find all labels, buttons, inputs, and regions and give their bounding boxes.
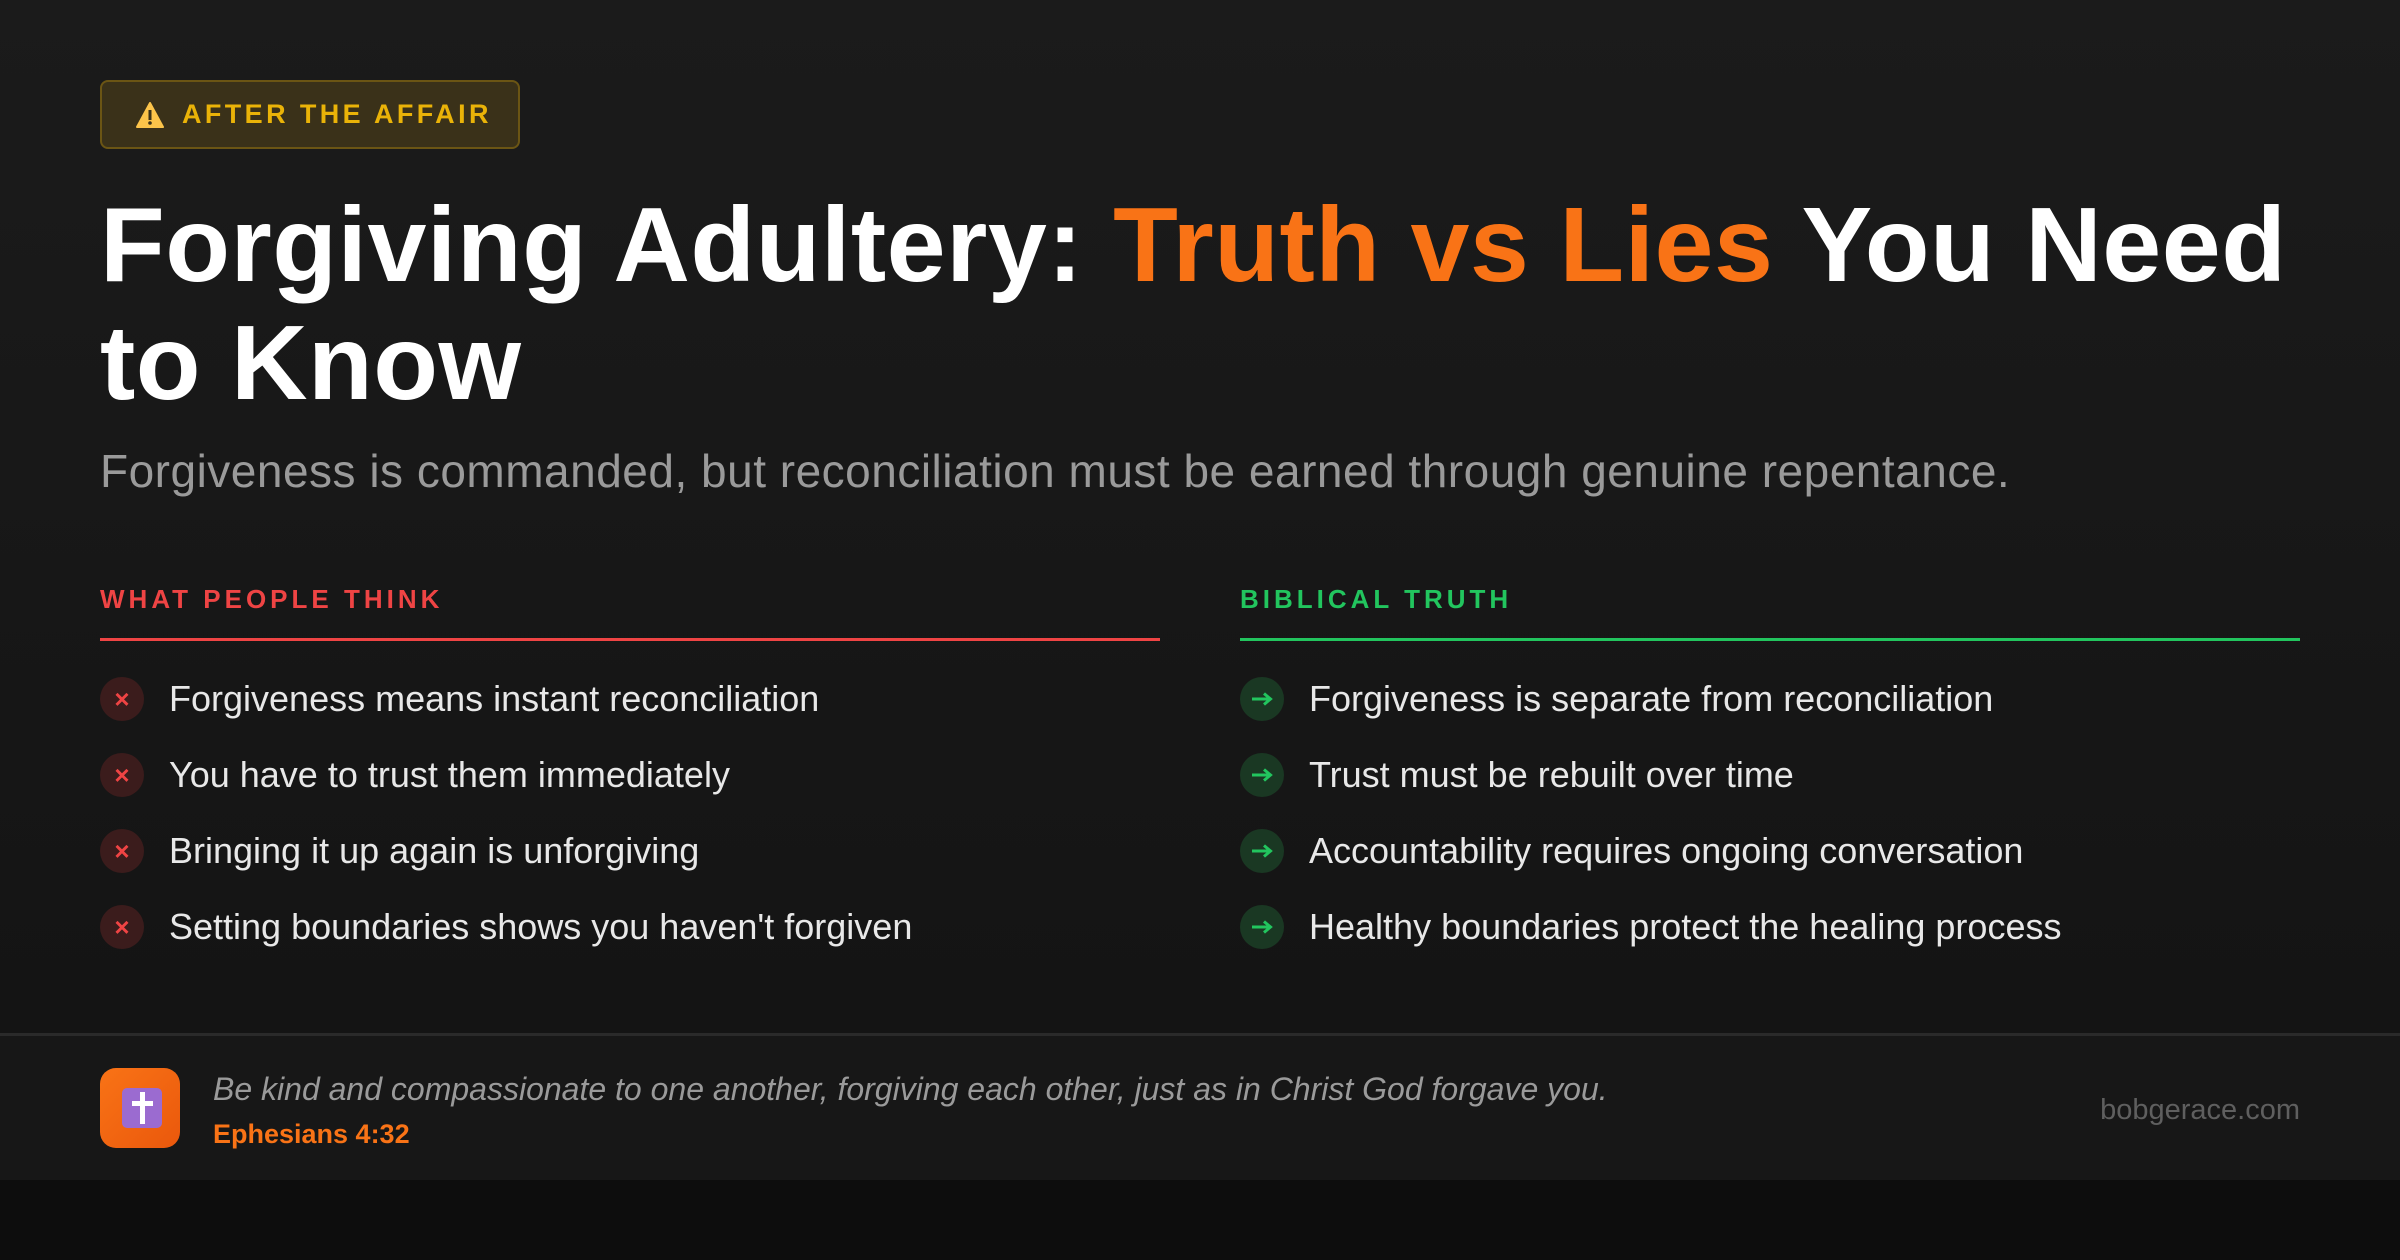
reference: Ephesians 4:32 [213, 1119, 410, 1149]
item 1: Forgiveness is separate from reconciliation [1309, 678, 1993, 719]
heading: biblical truth: BIBLICAL TRUTH [1240, 584, 1512, 614]
item 1: Forgiveness means instant reconciliation [169, 678, 819, 719]
item 2: Trust must be rebuilt over time [1309, 754, 1794, 795]
item 3: × [114, 836, 130, 866]
heading: biblical truth [1240, 580, 2300, 641]
item 2: You have to trust them immediately [169, 754, 730, 795]
item 4: Healthy boundaries protect the healing process [1309, 906, 2061, 947]
quote: Be kind and compassionate to one another, forgiving each other, just as in Christ God forgave you. [213, 1071, 1608, 1107]
subtitle: Forgiveness is commanded, but reconciliation must be earned through genuine repentance. [100, 445, 2010, 497]
panel: what people think [100, 584, 1160, 949]
panel: biblical truth [1240, 584, 2300, 949]
heading: what people think [100, 580, 1160, 641]
badge: after the affair: AFTER THE AFFAIR [182, 99, 492, 129]
badge: after the affair [100, 80, 520, 149]
icon: cross [100, 1068, 180, 1148]
item 4: Setting boundaries shows you haven't forgiven [169, 906, 912, 947]
footer [0, 1033, 2400, 1180]
item 1: × [114, 684, 130, 714]
site: bobgerace.com [2100, 1094, 2300, 1126]
item 3: Accountability requires ongoing conversation [1309, 830, 2023, 871]
item 3: Bringing it up again is unforgiving [169, 830, 699, 871]
item 4: × [114, 912, 130, 942]
item 2: × [114, 760, 130, 790]
title: Forgiving Adultery: Truth vs Lies You Need to Know [100, 186, 2286, 422]
heading: what people think: WHAT PEOPLE THINK [100, 584, 443, 614]
